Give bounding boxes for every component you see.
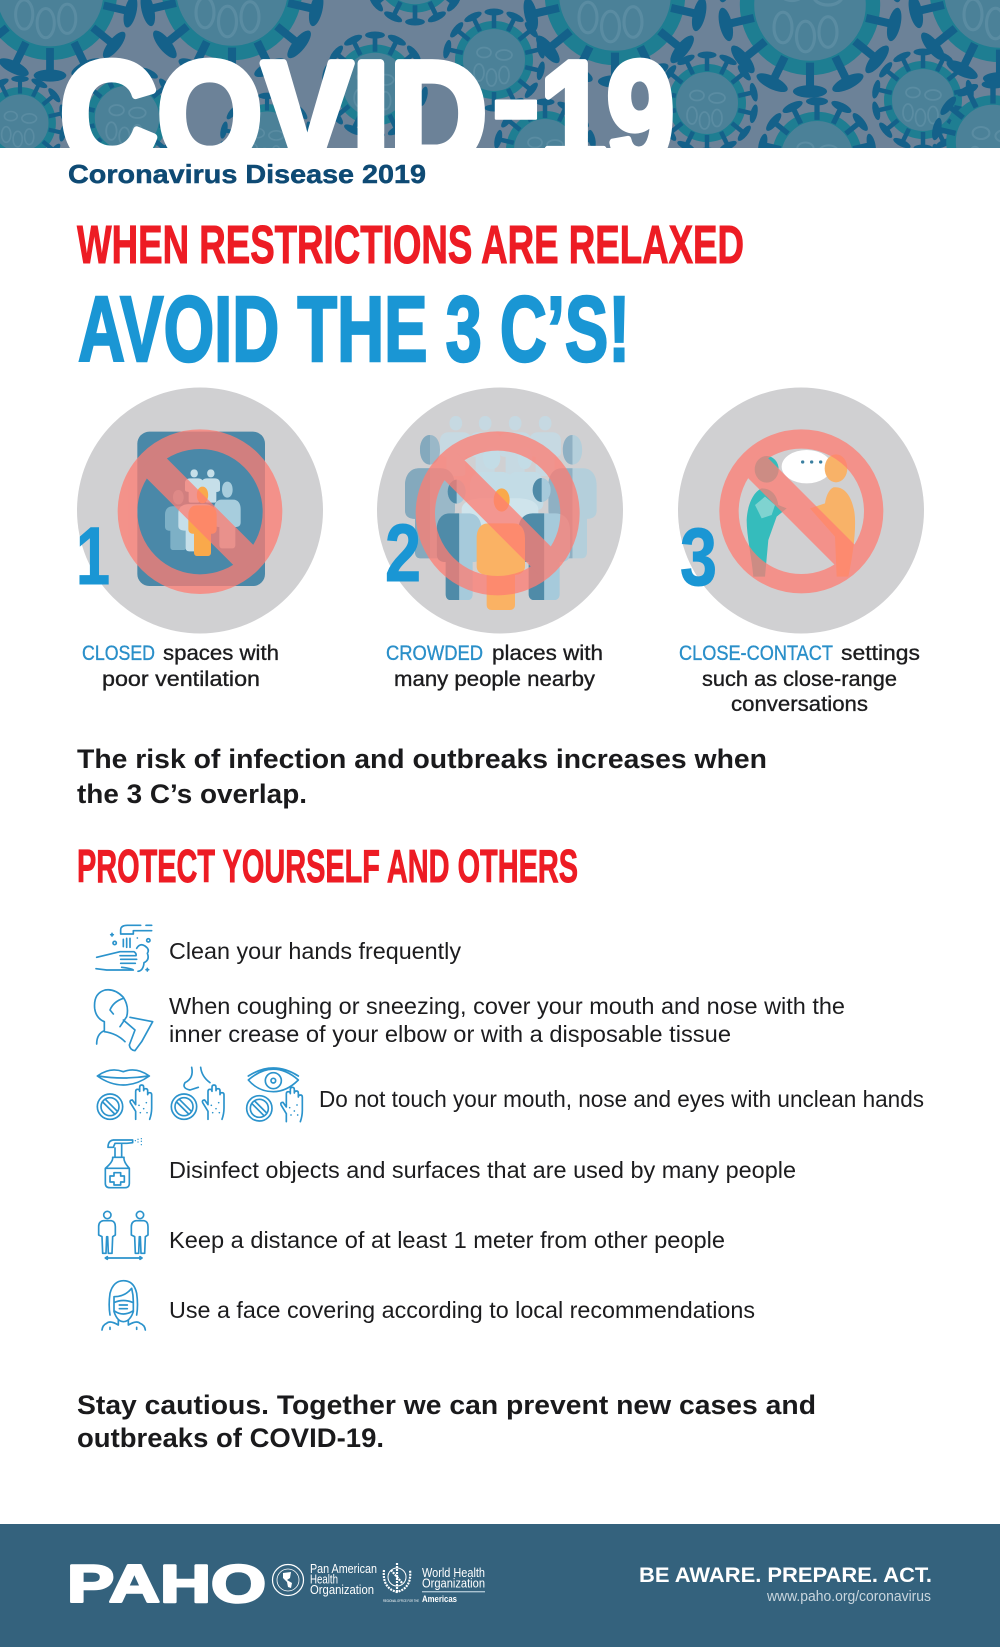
icon: physical distance	[99, 1211, 148, 1259]
icon: spray bottle	[105, 1139, 141, 1188]
text block: closing statement: outbreaks of COVID-19.	[77, 1423, 384, 1453]
PAHO name: Health	[310, 1572, 338, 1586]
caption: crowded	[386, 641, 603, 691]
WHO name: World Health	[422, 1565, 485, 1580]
icon: cough into elbow	[95, 990, 153, 1051]
icon: WHO emblem	[384, 1563, 410, 1592]
footer band	[0, 1524, 1000, 1647]
subtitle: Coronavirus Disease 2019	[68, 159, 426, 189]
number 2: 2	[385, 508, 421, 599]
caption: close contact: conversations	[731, 692, 868, 716]
caption: crowded: many people nearby	[394, 667, 595, 691]
caption: closed: spaces with	[163, 641, 279, 665]
text block: risk statement	[77, 744, 767, 809]
header banner	[0, 0, 1000, 217]
heading: protect yourself and others: PROTECT YOURSELF AND OTHERS	[77, 840, 578, 892]
illustration: closed room with people	[137, 432, 265, 586]
caption: close contact: settings	[841, 641, 920, 665]
icon: PAHO emblem	[272, 1564, 304, 1596]
number 1: 1	[76, 511, 110, 602]
text: disinfect: Disinfect objects and surfaces that are used by many people	[169, 1157, 796, 1183]
caption: close contact	[679, 641, 920, 716]
PAHO logo wordmark: PAHO	[67, 1555, 266, 1614]
text: keep distance: Keep a distance of at least 1 meter from other people	[169, 1227, 725, 1253]
text: cover cough: When coughing or sneezing, cover your mouth and nose with the	[169, 993, 845, 1019]
caption: closed: CLOSED	[82, 642, 155, 665]
caption: close contact: CLOSE-CONTACT	[679, 642, 833, 665]
caption: crowded: places with	[492, 641, 603, 665]
caption: closed: poor ventilation	[102, 667, 260, 691]
number 3: 3	[680, 512, 717, 603]
text block: closing statement	[77, 1390, 816, 1453]
panel: closed spaces	[76, 388, 323, 691]
WHO name: Americas	[422, 1594, 457, 1605]
text: cover cough: inner crease of your elbow or with a disposable tissue	[169, 1021, 731, 1047]
website: www.paho.org/coronavirus	[766, 1589, 931, 1605]
title: COVID-19: -	[490, 15, 542, 180]
text: face covering: Use a face covering according to local recommendations	[169, 1297, 755, 1323]
illustration: two people talking	[747, 450, 855, 577]
PAHO name: Pan American	[310, 1562, 377, 1576]
caption: crowded: CROWDED	[386, 642, 483, 665]
caption: close contact: such as close-range	[702, 667, 897, 691]
title: COVID-19: 19	[540, 32, 674, 197]
caption: closed	[82, 641, 279, 691]
panel: crowded places	[377, 388, 623, 691]
WHO name: Organization	[422, 1576, 485, 1590]
WHO name: REGIONAL OFFICE FOR THE	[383, 1598, 419, 1603]
text: do not touch: Do not touch your mouth, nose and eyes with unclean hands	[319, 1086, 924, 1112]
icon: prohibition sign	[729, 439, 874, 584]
title: COVID-19: COVID	[60, 32, 487, 197]
text block: risk statement: the 3 C’s overlap.	[77, 779, 307, 809]
heading: avoid the 3 C's: AVOID THE 3 C’S!	[78, 277, 630, 381]
WHO name	[383, 1565, 485, 1605]
slogan: BE AWARE. PREPARE. ACT.	[639, 1564, 932, 1587]
icons: do not touch mouth nose eyes	[97, 1067, 302, 1122]
title: COVID-19	[60, 15, 674, 197]
PAHO name: Organization	[310, 1583, 374, 1597]
icon: face covering	[102, 1281, 145, 1330]
text: clean hands: Clean your hands frequently	[169, 938, 461, 964]
list: protective measures	[95, 925, 924, 1330]
icon: prohibition sign	[127, 439, 272, 584]
virus pattern	[0, 0, 1000, 217]
PAHO name	[310, 1562, 377, 1597]
panel: close-contact settings	[678, 388, 924, 716]
illustration: crowd	[405, 416, 597, 610]
icon: prohibition sign	[425, 441, 570, 586]
text: cover cough	[169, 993, 845, 1047]
text block: risk statement: The risk of infection and outbreaks increases when	[77, 744, 767, 774]
text block: closing statement: Stay cautious. Together we can prevent new cases and	[77, 1390, 816, 1420]
icon: hand washing	[96, 925, 152, 971]
